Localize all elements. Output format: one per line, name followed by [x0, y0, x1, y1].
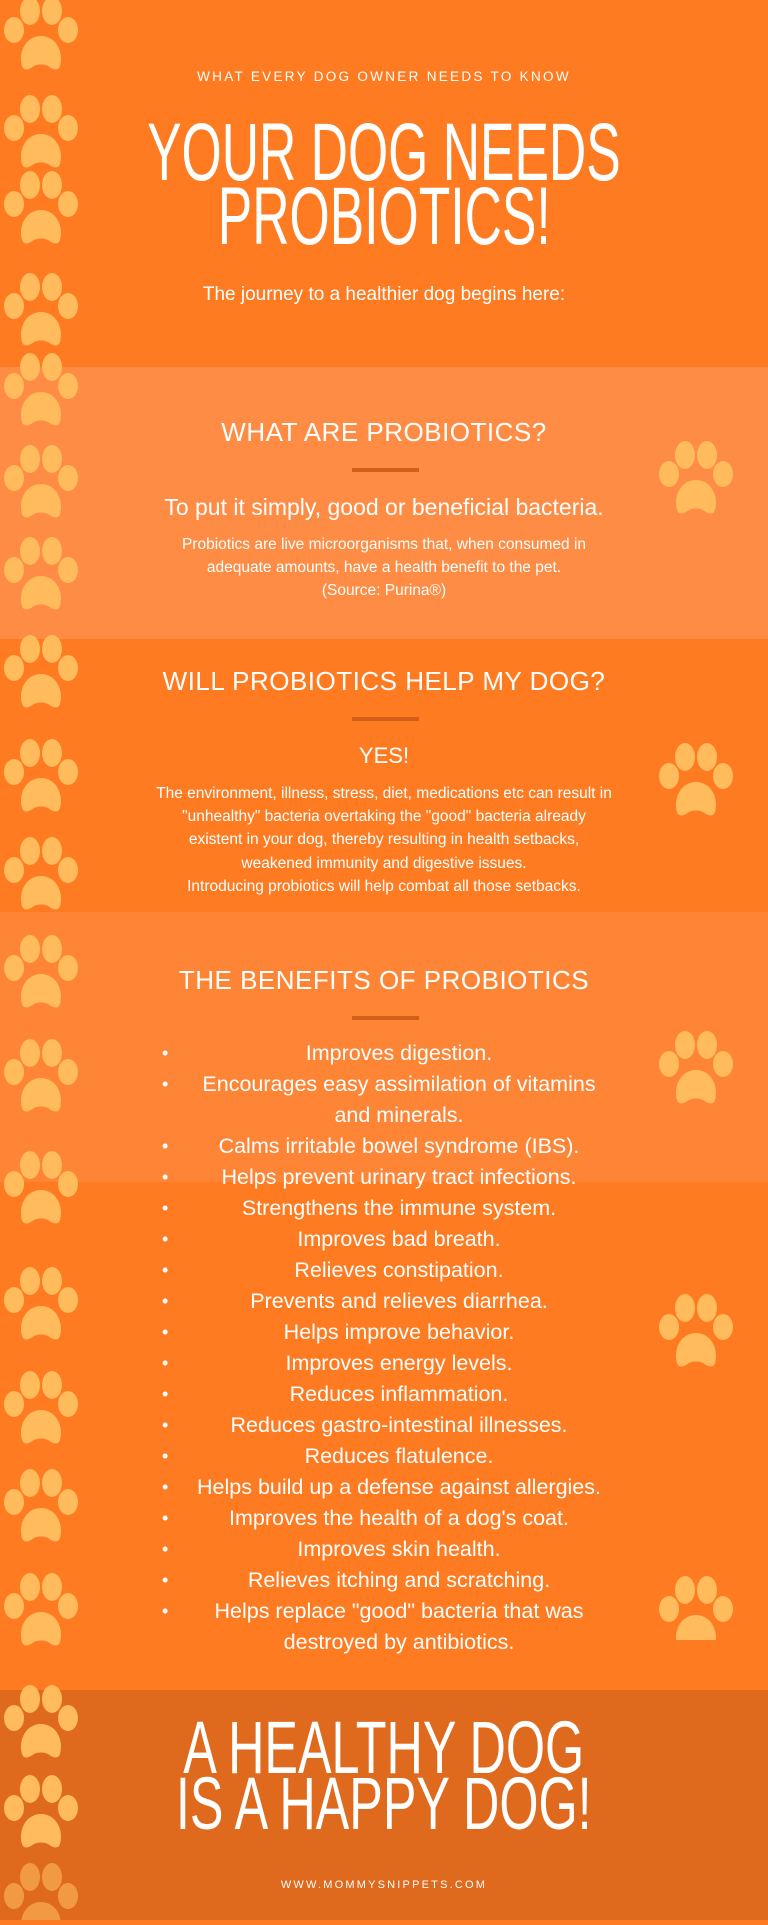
benefits list: • — [162, 1291, 168, 1311]
benefits list: Improves bad breath. — [297, 1227, 501, 1251]
title: PROBIOTICS! — [218, 171, 550, 262]
benefits list: Improves digestion. — [306, 1041, 492, 1065]
benefits list: Encourages easy assimilation of vitamins — [202, 1072, 596, 1096]
benefits list: and minerals. — [334, 1103, 464, 1127]
benefits list: • — [162, 1322, 168, 1342]
subtitle: WHAT EVERY DOG OWNER NEEDS TO KNOW — [197, 69, 571, 84]
benefits list: Improves energy levels. — [285, 1351, 513, 1375]
body text — [182, 536, 586, 599]
benefits list: Helps build up a defense against allergies. — [197, 1475, 601, 1499]
benefits list: Reduces gastro-intestinal illnesses. — [230, 1413, 568, 1437]
benefits list: • — [162, 1570, 168, 1590]
footer slogan — [176, 1706, 592, 1845]
heading: THE BENEFITS OF PROBIOTICS — [179, 965, 589, 995]
benefits list: • — [162, 1260, 168, 1280]
body text: existent in your dog, thereby resulting in health setbacks, — [189, 831, 579, 848]
benefits list: • — [162, 1601, 168, 1621]
benefits list: • — [162, 1167, 168, 1187]
benefits list: Strengthens the immune system. — [242, 1196, 556, 1220]
benefits list: Relieves itching and scratching. — [248, 1568, 550, 1592]
answer: YES! — [359, 743, 409, 768]
benefits list: • — [162, 1477, 168, 1497]
benefits list: • — [162, 1384, 168, 1404]
icon: paws left column — [4, 0, 78, 1920]
benefits list: Improves skin health. — [297, 1537, 501, 1561]
panel: benefits — [162, 965, 601, 1654]
benefits list: Calms irritable bowel syndrome (IBS). — [219, 1134, 579, 1158]
benefits list: • — [162, 1043, 168, 1063]
benefits list: • — [162, 1353, 168, 1373]
icon: paws right column — [659, 441, 733, 1640]
body text: weakened immunity and digestive issues. — [241, 855, 527, 872]
benefits list: • — [162, 1508, 168, 1528]
benefits list: Helps improve behavior. — [284, 1320, 514, 1344]
body text: adequate amounts, have a health benefit to the pet. — [207, 559, 561, 576]
body text: The environment, illness, stress, diet, medications etc can result in — [156, 785, 612, 802]
benefits list: Prevents and relieves diarrhea. — [250, 1289, 548, 1313]
lead text: To put it simply, good or beneficial bacteria. — [164, 494, 604, 520]
benefits list: Improves the health of a dog's coat. — [229, 1506, 569, 1530]
benefits list: Helps prevent urinary tract infections. — [222, 1165, 576, 1189]
benefits list: • — [162, 1415, 168, 1435]
benefits list: destroyed by antibiotics. — [284, 1630, 514, 1654]
band: benefits top lighter — [0, 912, 768, 1182]
footer slogan: IS A HAPPY DOG! — [176, 1762, 592, 1845]
body text — [156, 785, 612, 895]
benefits list: • — [162, 1229, 168, 1249]
benefits list — [162, 1041, 601, 1654]
benefits list: • — [162, 1446, 168, 1466]
body text: Introducing probiotics will help combat all those setbacks. — [187, 878, 581, 895]
body text: Probiotics are live microorganisms that, when consumed in — [182, 536, 586, 553]
band: section what are probiotics — [0, 367, 768, 639]
benefits list: Helps replace "good" bacteria that was — [214, 1599, 584, 1623]
benefits list: • — [162, 1539, 168, 1559]
band: footer — [0, 1690, 768, 1920]
benefits list: • — [162, 1198, 168, 1218]
benefits list: • — [162, 1074, 168, 1094]
body text: "unhealthy" bacteria overtaking the "good" bacteria already — [182, 808, 586, 825]
footer slogan: A HEALTHY DOG — [184, 1706, 584, 1789]
benefits list: Reduces inflammation. — [290, 1382, 508, 1406]
heading: WHAT ARE PROBIOTICS? — [221, 417, 547, 447]
intro text: The journey to a healthier dog begins here: — [203, 284, 565, 305]
panel: will probiotics help — [156, 666, 612, 895]
panel: what are probiotics — [164, 417, 604, 599]
heading: WILL PROBIOTICS HELP MY DOG? — [163, 666, 605, 696]
footer url: WWW.MOMMYSNIPPETS.COM — [281, 1879, 487, 1891]
benefits list: Reduces flatulence. — [305, 1444, 493, 1468]
title — [147, 107, 621, 262]
title: YOUR DOG NEEDS — [147, 107, 621, 198]
benefits list: Relieves constipation. — [294, 1258, 504, 1282]
benefits list: • — [162, 1136, 168, 1156]
body text: (Source: Purina®) — [322, 582, 446, 599]
